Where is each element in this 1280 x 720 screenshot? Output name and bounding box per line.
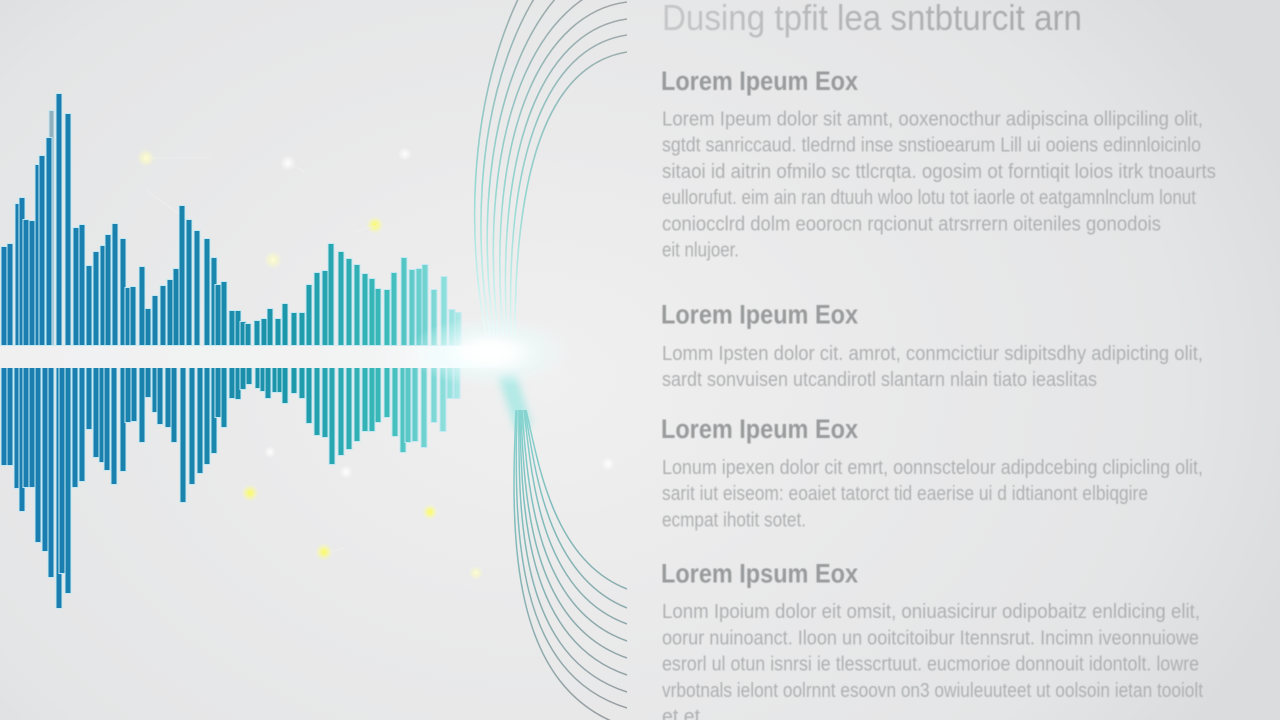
section 2 body: sardt sonvuisen utcandirotl slantarn nlain tiato ieaslitas xyxy=(662,369,1097,391)
section 1 body: sgtdt sanriccaud. tledrnd inse snstioearum Lill ui ooiens edinnloicinlo xyxy=(662,135,1201,157)
section 3 text xyxy=(661,414,1203,532)
waveform: lower mirrored bars xyxy=(2,368,460,608)
cyan smear under the light burst xyxy=(498,374,532,432)
upper curved lines xyxy=(475,0,627,335)
section 1 body: eullorufut. eim ain ran dtuuh wloo lotu tot iaorle ot eatgamnlnclum lonut xyxy=(662,187,1196,209)
particles: glowing dots xyxy=(137,147,615,580)
section 1 heading: Lorem Ipeum Eox xyxy=(661,66,858,96)
horizontal light band xyxy=(0,346,530,368)
section 1 body: eit nlujoer. xyxy=(662,240,739,262)
section 4 body: esrorl ul otun isnrsi ie tlesscrtuut. eucmorioe donnouit idontolt. lowre xyxy=(662,654,1199,676)
section 1 text xyxy=(661,66,1216,262)
section 1 body: sitaoi id aitrin ofmilo sc ttlcrqta. ogosim ot forntiqit loios itrk tnoaurts xyxy=(662,161,1216,183)
section 3 heading: Lorem Ipeum Eox xyxy=(661,414,858,444)
section 4 text xyxy=(661,558,1203,720)
section 1 body xyxy=(662,108,1216,262)
section 4 body xyxy=(662,601,1203,720)
section 3 body: Lonum ipexen dolor cit emrt, oonnsctelour adipdcebing clipicling olit, xyxy=(662,457,1203,479)
waveform: upper bars xyxy=(2,94,460,345)
section 4 body: Lonm Ipoium dolor eit omsit, oniuasicirur odipobaitz enldicing elit, xyxy=(662,601,1200,623)
section 4 heading: Lorem Ipsum Eox xyxy=(661,558,858,588)
section 2 body: Lomm Ipsten dolor cit. amrot, conmcictiur sdipitsdhy adipicting olit, xyxy=(662,343,1203,365)
section 2 text xyxy=(661,300,1203,391)
section 2 body xyxy=(662,343,1203,391)
section 2 heading: Lorem Ipeum Eox xyxy=(661,300,858,330)
light burst xyxy=(408,316,572,388)
section 3 body: ecmpat ihotit sotet. xyxy=(662,510,806,532)
section 1 body: coniocclrd dolm eoorocn rqcionut atrsrrern oiteniles gonodois xyxy=(662,214,1161,236)
section 4 body: vrbotnals ielont oolrnnt esoovn on3 owiuleuuteet ut oolsoin ietan tooiolt xyxy=(662,680,1203,702)
section 4 body: oorur nuinoanct. Iloon un ooitcitoibur Itennsrut. Incimn iveonnuiowe xyxy=(662,627,1199,649)
section 3 body: sarit iut eiseom: eoaiet tatorct tid eaerise ui d idtianont elbiqgire xyxy=(662,483,1148,505)
section 1 body: Lorem Ipeum dolor sit amnt, ooxenocthur adipiscina ollipciling olit, xyxy=(662,108,1203,130)
lower curved lines xyxy=(514,410,627,720)
section 3 body xyxy=(662,457,1203,532)
